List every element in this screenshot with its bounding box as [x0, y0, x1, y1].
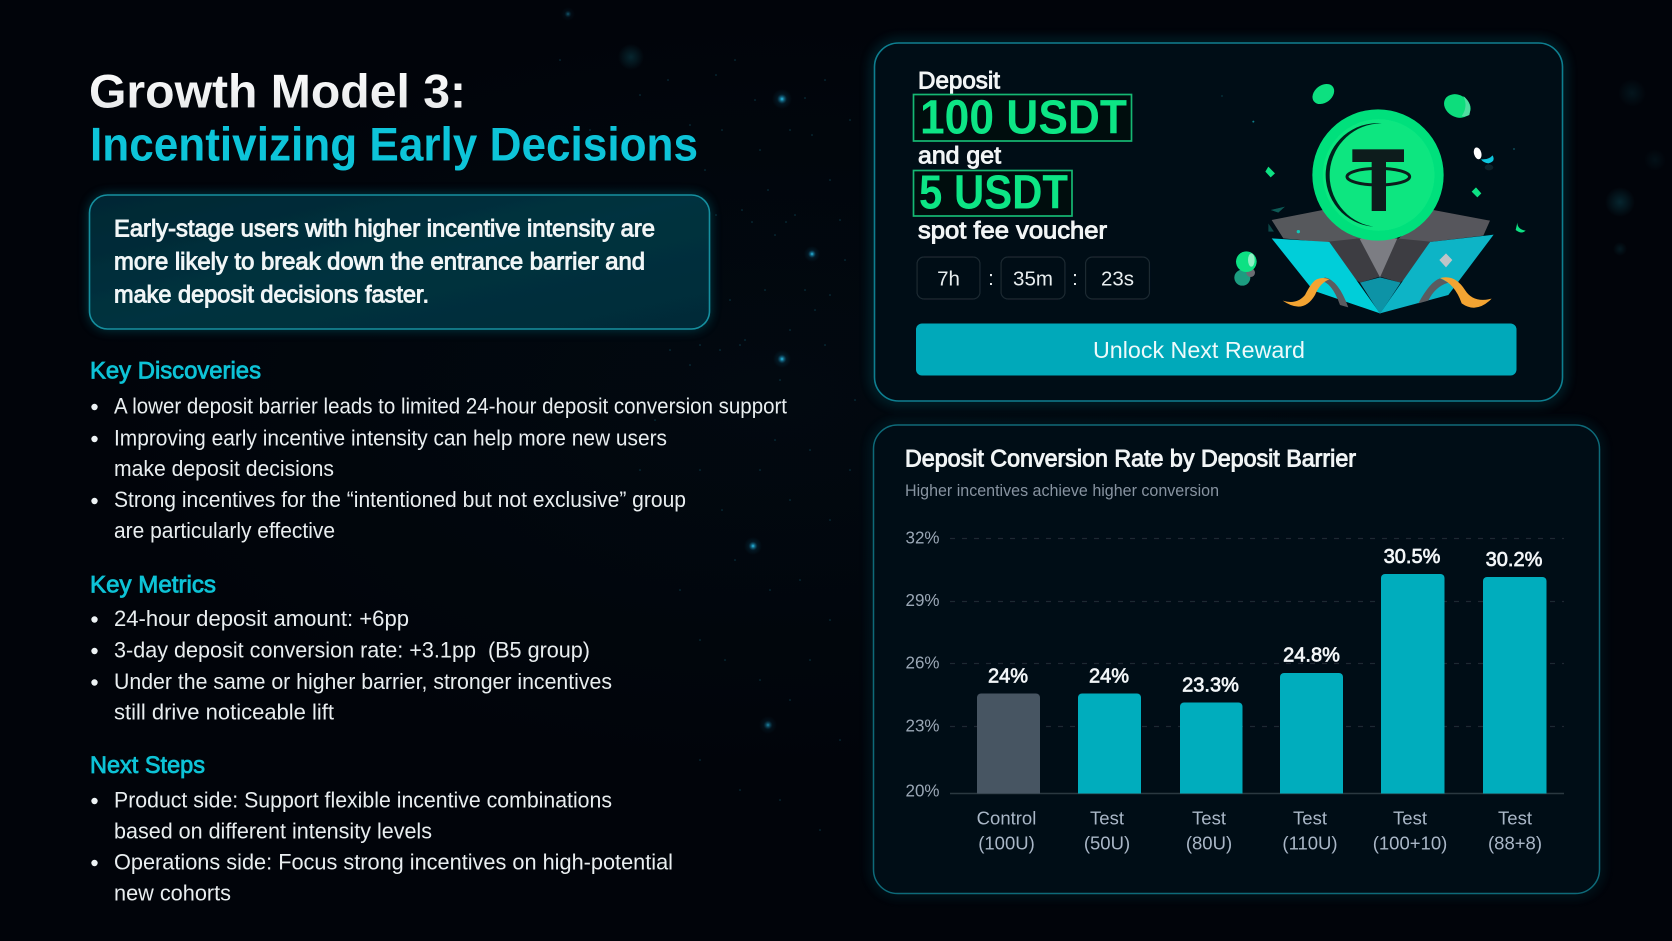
bullet list: key metrics: 3-day deposit conversion rate: +3.1pp (B5 group)	[114, 638, 590, 662]
category labels: Test	[1393, 808, 1427, 828]
highlight: 100 USDT: 100 USDT	[920, 92, 1127, 144]
countdown timer: 7h	[937, 268, 960, 290]
bullet list: key discoveries: Strong incentives for the “intentioned but not exclusive” group	[114, 487, 686, 512]
bars	[977, 574, 1546, 794]
value labels: 24.8%	[1283, 644, 1340, 666]
callout: make deposit decisions faster.	[114, 282, 429, 308]
bullet list: next steps	[91, 788, 673, 906]
callout: Early-stage users with higher incentive intensity are	[114, 216, 655, 242]
chart subtitle: Higher incentives achieve higher conversion	[905, 481, 1219, 500]
value labels	[988, 546, 1543, 696]
offer text: and get	[918, 142, 1001, 170]
category labels	[977, 808, 1542, 854]
panel: bar chart card	[874, 425, 1600, 894]
chart title: Deposit Conversion Rate by Deposit Barrier	[905, 446, 1356, 472]
bullet list: key discoveries: make deposit decisions	[114, 456, 334, 481]
bullet list: key discoveries: are particularly effective	[114, 518, 335, 543]
offer text: Deposit	[918, 68, 1000, 94]
section: key metrics	[90, 572, 612, 724]
callout: more likely to break down the entrance barrier and	[114, 248, 645, 276]
bullet list: key metrics: still drive noticeable lift	[114, 700, 334, 724]
title	[89, 64, 698, 170]
countdown timer	[917, 257, 1150, 299]
category labels: (80U)	[1186, 832, 1232, 854]
bullet list: key discoveries	[91, 394, 787, 543]
value labels: 30.2%	[1486, 549, 1543, 571]
bullet list: next steps: new cohorts	[114, 880, 231, 906]
illustration: gift box with USDT coin	[1221, 80, 1526, 314]
countdown timer: :	[988, 267, 994, 290]
value labels: 30.5%	[1384, 546, 1441, 568]
button: unlock next reward	[916, 324, 1516, 376]
offer text	[914, 68, 1132, 244]
offer text: spot fee voucher	[918, 218, 1107, 244]
bullet list: key metrics: Under the same or higher barrier, stronger incentives	[114, 669, 612, 694]
y axis and grid: 26%	[906, 652, 940, 672]
title: Incentivizing Early Decisions	[90, 118, 698, 170]
category labels: (100U)	[978, 832, 1035, 854]
y axis and grid: 20%	[906, 780, 940, 800]
y axis and grid: 29%	[906, 590, 940, 610]
category labels: Test	[1090, 808, 1124, 828]
bullet list: key discoveries: Improving early incentive intensity can help more new users	[114, 426, 667, 450]
value labels: 23.3%	[1182, 674, 1239, 696]
category labels: Test	[1293, 808, 1327, 828]
category labels: (100+10)	[1373, 832, 1447, 854]
bullet list: key metrics: 24-hour deposit amount: +6pp	[114, 606, 409, 631]
callout	[90, 195, 710, 329]
panel: deposit reward card	[874, 43, 1562, 401]
category labels: Test	[1498, 808, 1532, 828]
bullet list: key metrics	[91, 606, 612, 724]
category labels: (50U)	[1084, 832, 1130, 854]
countdown timer: 35m	[1013, 268, 1053, 290]
highlight: 5 USDT: 5 USDT	[919, 166, 1068, 220]
y axis and grid: 32%	[906, 528, 940, 548]
section: next steps	[90, 752, 673, 906]
category labels: Control	[977, 808, 1036, 828]
countdown timer: :	[1072, 267, 1078, 290]
countdown timer: 23s	[1101, 268, 1134, 290]
heading: key metrics: Key Metrics	[90, 572, 216, 598]
title: Growth Model 3:	[89, 64, 466, 118]
y axis and grid	[906, 528, 1564, 800]
bullet list: key discoveries: A lower deposit barrier leads to limited 24-hour deposit conversion support	[114, 394, 787, 418]
y axis and grid: 23%	[906, 716, 940, 736]
heading: next steps: Next Steps	[90, 752, 205, 779]
section: key discoveries	[90, 358, 787, 543]
value labels: 24%	[988, 666, 1028, 688]
bullet list: next steps: Product side: Support flexible incentive combinations	[114, 788, 612, 812]
category labels: Test	[1192, 808, 1226, 828]
button: unlock next reward: Unlock Next Reward	[1093, 337, 1305, 363]
bullet list: next steps: based on different intensity levels	[114, 818, 432, 844]
heading: key discoveries: Key Discoveries	[90, 358, 261, 384]
value labels: 24%	[1089, 666, 1129, 688]
category labels: (110U)	[1282, 832, 1338, 854]
bullet list: next steps: Operations side: Focus strong incentives on high-potential	[114, 850, 673, 874]
category labels: (88+8)	[1488, 832, 1542, 854]
